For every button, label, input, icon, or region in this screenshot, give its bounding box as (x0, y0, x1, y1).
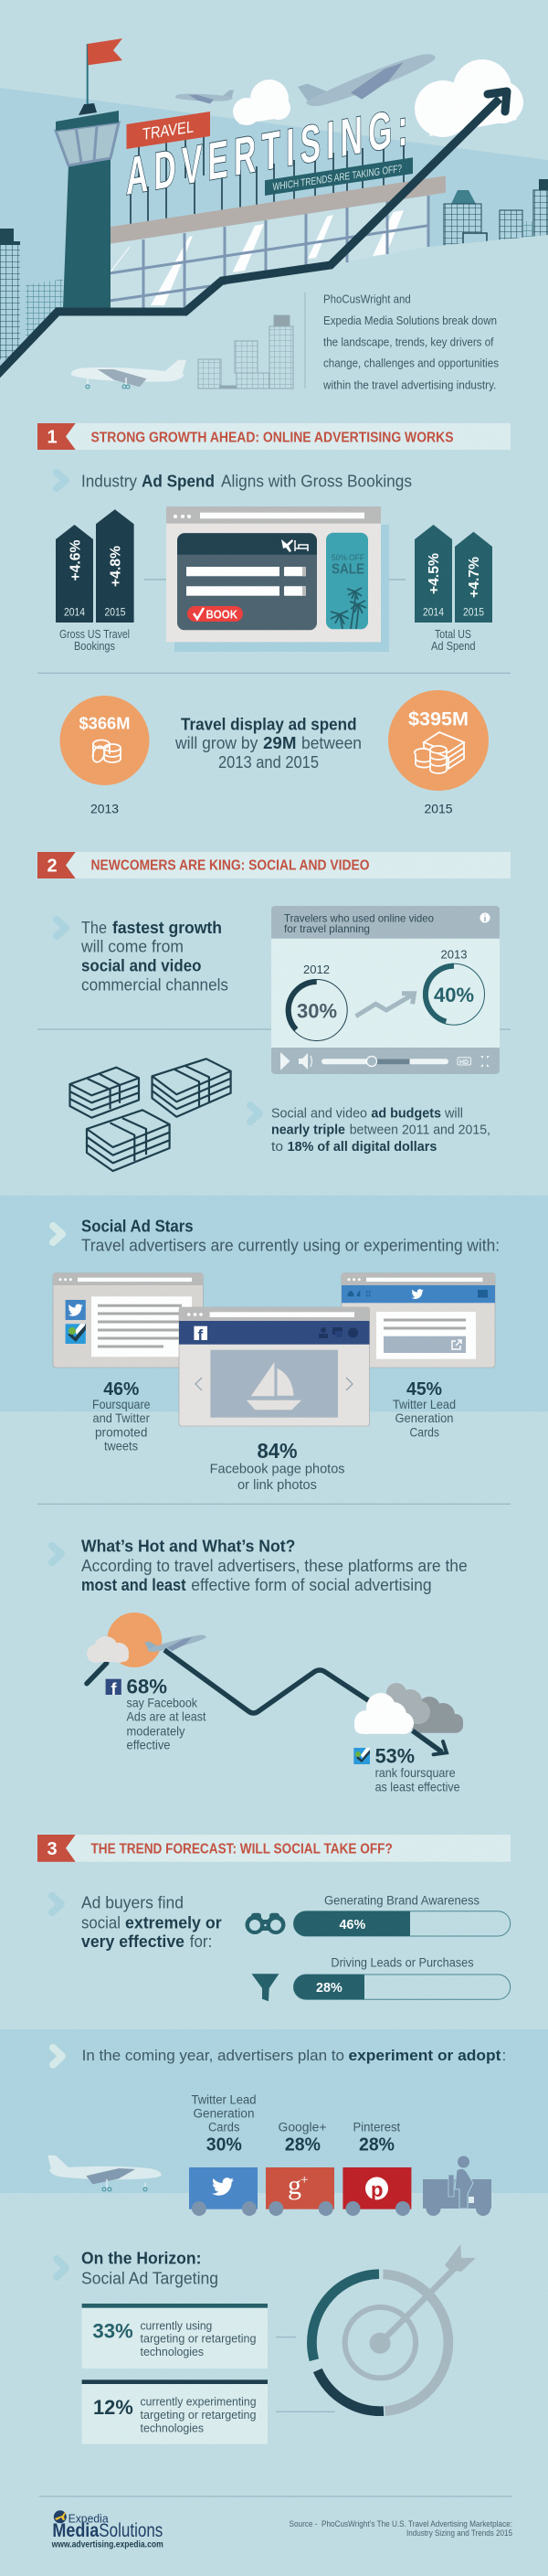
bar: driving leads or purchases: Driving Leads or Purchases (331, 1956, 474, 1970)
section 3 banner: THE TREND FORECAST: WILL SOCIAL TAKE OFF? (91, 1841, 393, 1857)
text: ad budgets: nearly triple (271, 1123, 345, 1138)
heading: ad spend: Industry (81, 471, 138, 490)
source note: Source - PhoCusWright’s The U.S. Travel Advertising Marketplace: (289, 2519, 512, 2529)
heading: social ad stars: Social Ad Stars (81, 1218, 194, 1236)
donut: 2012 30%: 30% (297, 999, 337, 1022)
chart: target (311, 2244, 476, 2411)
stat: 2013 spend (60, 696, 150, 815)
chart: total US ad spend arrows: 2014 (423, 605, 444, 618)
heading: ad spend (81, 471, 412, 490)
logo: expedia media solutions: Media (52, 2520, 100, 2541)
icon: large plane (298, 41, 440, 118)
chart: hot and not path (87, 1613, 463, 1754)
icon: chevron (53, 1226, 62, 1242)
bar: driving leads or purchases (252, 1956, 511, 2001)
text: display ad spend: between (301, 734, 362, 752)
stat: facebook 68%: say Facebook (126, 1696, 198, 1710)
arrow: trend up (356, 994, 415, 1017)
text: display ad spend: will grow by (174, 734, 258, 752)
player controls: HD (459, 1059, 469, 1066)
stat: foursquare 53% (353, 1744, 460, 1794)
logo: expedia media solutions (51, 2510, 163, 2550)
heading: on the horizon: Social Ad Targeting (81, 2269, 218, 2287)
stat: 84%: Facebook page photos (210, 1462, 345, 1477)
icon: funnel (252, 1974, 279, 2001)
icon: chevron (53, 2048, 62, 2065)
icon: chevron (57, 920, 66, 936)
stat card: 33% using: targeting or retargeting (141, 2332, 256, 2346)
text: ad buyers: for: (190, 1932, 212, 1951)
stat: 2013 spend: $366M (79, 715, 130, 733)
text: fastest growth: The (81, 919, 107, 937)
stat: 2015 spend (388, 690, 489, 815)
logo: expedia media solutions: Expedia (68, 2511, 109, 2525)
browser: lead generation cards (342, 1273, 495, 1368)
text: fastest growth: commercial channels (81, 975, 228, 994)
section 3 banner (37, 1835, 511, 1862)
text: ad budgets: will (444, 1106, 463, 1121)
text: ad budgets: ad budgets (371, 1106, 441, 1121)
stat: 84%: 84% (258, 1439, 298, 1463)
video player panel (271, 906, 500, 1074)
cart: twitter 30% (189, 2093, 258, 2216)
stat card: 33% using: 33% (92, 2319, 133, 2342)
icon: cloud large (415, 59, 523, 137)
chart: total US ad spend arrows (415, 525, 492, 653)
stat: 45%: Generation (395, 1410, 453, 1425)
heading: coming year (82, 2047, 506, 2064)
icon: coins and notes (415, 732, 464, 773)
text: fastest growth (80, 919, 228, 994)
browser: booking page (166, 506, 389, 652)
stat: foursquare 53%: 53% (375, 1744, 415, 1767)
stat: 84%: or link photos (237, 1477, 317, 1493)
chart: total US ad spend arrows: Ad Spend (431, 640, 476, 653)
booking form: BOOK (206, 607, 238, 622)
video player panel: Travelers who used online video (284, 911, 434, 924)
text: ad budgets: Social and video (271, 1106, 367, 1121)
icon: sailboat (247, 1362, 301, 1410)
icon: chevron (52, 1546, 61, 1562)
sale ad (326, 533, 368, 629)
stat: 45%: Twitter Lead (393, 1397, 456, 1411)
cart: google plus 28%: + (300, 2173, 308, 2187)
heading: coming year: experiment or adopt (349, 2047, 501, 2064)
icon: facebook (194, 1326, 207, 1344)
text: display ad spend: 29M (263, 734, 296, 752)
text: ad buyers (81, 1894, 222, 1951)
section 2 banner: 2 (47, 856, 58, 876)
cart: pinterest 28%: p (371, 2178, 383, 2201)
heading: what's hot: effective form of social advertising (191, 1576, 432, 1594)
section 2 banner (37, 852, 511, 878)
stat: 2015 spend: 2015 (424, 801, 453, 815)
icon: foursquare (353, 1748, 370, 1764)
sign: travel: TRAVEL (142, 118, 194, 144)
icon: money stacks (69, 1059, 231, 1171)
stat: foursquare 53%: as least effective (375, 1779, 460, 1794)
bar: generating brand awareness: 46% (340, 1917, 365, 1932)
chart: gross US travel bookings arrows: Bookings (74, 640, 115, 653)
terminal building (85, 176, 446, 312)
cart: twitter 30%: Twitter Lead (192, 2093, 256, 2107)
text: ad buyers: social (81, 1913, 121, 1932)
stat card: 33% using: currently using (141, 2318, 212, 2332)
stat: foursquare 53%: rank foursquare (375, 1765, 456, 1780)
stat: 2015 spend: $395M (408, 708, 469, 729)
heading: what's hot: According to travel advertisers, these platforms are the (81, 1557, 468, 1575)
cart: google plus 28%: g (288, 2170, 301, 2200)
donut: 2013 40%: 2013 (440, 947, 468, 961)
stat: 46%: and Twitter (93, 1410, 150, 1425)
section 1 banner (37, 423, 511, 450)
stat: 46%: Foursquare (92, 1397, 151, 1411)
text: fastest growth: social and video (81, 957, 201, 975)
text: ad budgets: between 2011 and 2015, (350, 1123, 490, 1138)
chart: gross US travel bookings arrows: +4.8% (108, 546, 124, 587)
chart: total US ad spend arrows: 2015 (463, 605, 484, 618)
sign posts (131, 134, 404, 224)
logo: expedia media solutions: Solutions (99, 2520, 163, 2541)
donut: 2013 40% (424, 947, 484, 1025)
growth arrow (0, 91, 507, 376)
text: ad buyers: extremely or (125, 1913, 222, 1932)
chart: gross US travel bookings arrows (56, 509, 134, 653)
section 2 banner: NEWCOMERS ARE KING: SOCIAL AND VIDEO (91, 858, 369, 874)
text: ad buyers: very effective (81, 1932, 184, 1951)
title: advertising: ADVERTISING: (126, 98, 408, 207)
icon: chevron (52, 1896, 61, 1912)
chart: total US ad spend arrows: +4.7% (467, 557, 482, 598)
icon: storm clouds (354, 1683, 463, 1734)
control tower (56, 103, 119, 308)
logo: expedia media solutions: www.advertising.expedia.com (51, 2539, 163, 2550)
section 3 banner: 3 (47, 1839, 58, 1859)
stat card: 12% experimenting: targeting or retargeting (141, 2408, 256, 2422)
stat card: 12% experimenting: currently experimenting (141, 2395, 256, 2409)
cart: google plus 28%: Google+ (278, 2121, 327, 2134)
intro text: Expedia Media Solutions break down (323, 314, 497, 327)
heading: coming year: : (502, 2047, 506, 2064)
icon: chevron (57, 2259, 66, 2277)
flag (88, 38, 122, 104)
sign: travel (126, 112, 210, 149)
cart: google plus 28%: 28% (285, 2135, 321, 2156)
icon: foursquare (66, 1324, 86, 1344)
stat card: 12% experimenting (82, 2379, 268, 2444)
heading: social ad stars: Travel advertisers are currently using or experimenting with: (81, 1236, 500, 1254)
heading: what's hot: most and least (81, 1576, 186, 1594)
icon: facebook: f (111, 1680, 117, 1698)
stat: facebook 68% (106, 1675, 206, 1751)
icon: cloud (87, 1636, 129, 1663)
browser: promoted tweets (53, 1273, 203, 1368)
heading: on the horizon: On the Horizon: (81, 2250, 201, 2268)
stat: facebook 68%: effective (126, 1737, 171, 1751)
text: ad buyers: Ad buyers find (81, 1894, 184, 1912)
grey skyline (198, 315, 293, 389)
section 1 banner: STRONG GROWTH AHEAD: ONLINE ADVERTISING WORKS (91, 430, 453, 445)
video player panel: for travel planning (284, 922, 370, 935)
stat: facebook 68%: 68% (126, 1675, 167, 1698)
text: display ad spend: 2013 and 2015 (218, 753, 319, 772)
chart: gross US travel bookings arrows: +4.6% (68, 539, 84, 581)
booking form (177, 533, 317, 630)
intro text: the landscape, trends, key drivers of (323, 335, 494, 348)
icon: runway plane (47, 2156, 162, 2191)
intro text: change, challenges and opportunities (323, 357, 499, 370)
donut: 2012 30% (286, 963, 347, 1040)
heading: what's hot (81, 1538, 468, 1594)
cart: pinterest 28% (342, 2121, 411, 2216)
stat: 46% (92, 1379, 151, 1453)
donut: 2013 40%: 40% (434, 984, 474, 1006)
heading: social ad stars (81, 1218, 500, 1254)
sale ad: SALE (332, 562, 364, 578)
stat card: 33% using: technologies (141, 2345, 205, 2358)
heading: coming year: In the coming year, advertisers plan to (82, 2047, 344, 2064)
stat card: 12% experimenting: 12% (93, 2396, 133, 2419)
icon: twitter (66, 1300, 86, 1320)
skyline right (444, 179, 548, 250)
cart: twitter 30%: Generation (194, 2107, 254, 2121)
stat: 46%: promoted (95, 1425, 147, 1440)
icon: coins (90, 740, 121, 764)
text: fastest growth: fastest growth (112, 919, 222, 937)
stat: facebook 68%: Ads are at least (126, 1709, 206, 1724)
browser: facebook page photos (179, 1307, 369, 1426)
stat: 46%: tweets (104, 1439, 138, 1453)
skyline left (0, 229, 63, 359)
stat card: 12% experimenting: technologies (141, 2421, 205, 2434)
icon: chevron (250, 1105, 259, 1122)
icon: plane (144, 1630, 207, 1656)
heading: what's hot: What’s Hot and What’s Not? (81, 1538, 295, 1556)
bar: generating brand awareness (245, 1893, 511, 1936)
stat: 46%: 46% (103, 1379, 140, 1400)
text: ad budgets: to (271, 1140, 283, 1155)
cart: twitter 30%: 30% (206, 2135, 242, 2156)
donut: 2012 30%: 2012 (303, 963, 330, 976)
section 1 banner: 1 (47, 428, 58, 448)
header illustration (0, 38, 548, 389)
chart: total US ad spend arrows: +4.5% (427, 553, 442, 594)
heading: ad spend: Ad Spend (142, 471, 215, 490)
player controls (280, 1052, 490, 1070)
chart: gross US travel bookings arrows: 2014 (64, 605, 85, 618)
icon: baggage tractor (423, 2156, 491, 2216)
source note (289, 2519, 512, 2539)
subtitle banner: WHICH TRENDS ARE TAKING OFF? (272, 164, 402, 193)
stat: facebook 68%: moderately (126, 1723, 184, 1738)
cart: pinterest 28%: 28% (359, 2135, 395, 2156)
icon: chevron (57, 473, 66, 488)
heading: ad spend: Aligns with Gross Bookings (221, 471, 412, 490)
icon: small plane (175, 90, 234, 103)
intro text: PhoCusWright and (323, 293, 411, 306)
source note: Industry Sizing and Trends 2015 (406, 2528, 512, 2539)
stat: 45%: Cards (409, 1425, 439, 1440)
stat: 45% (393, 1379, 456, 1440)
icon: cloud small (233, 80, 290, 125)
chart: total US ad spend arrows: Total US (435, 628, 471, 641)
bar: driving leads or purchases: 28% (316, 1980, 342, 1996)
icon: grounded plane (71, 360, 186, 389)
stat: 45%: 45% (406, 1379, 442, 1400)
cart: google plus 28% (266, 2121, 334, 2216)
cart: pinterest 28%: Pinterest (353, 2121, 400, 2134)
heading: on the horizon (81, 2250, 218, 2287)
intro text: within the travel advertising industry. (322, 378, 496, 392)
sale ad: 50% OFF (332, 553, 364, 562)
text: ad budgets (271, 1106, 490, 1155)
stat card: 33% using (82, 2304, 268, 2368)
stat: 84% (210, 1439, 345, 1493)
text: fastest growth: will come from (80, 938, 184, 956)
chart: gross US travel bookings arrows: Gross US Travel (59, 628, 130, 641)
chart: gross US travel bookings arrows: 2015 (104, 605, 126, 618)
icon: binoculars (245, 1913, 285, 1934)
cart: twitter 30%: Cards (208, 2121, 240, 2134)
text: display ad spend: Travel display ad spend (181, 715, 356, 733)
bar: generating brand awareness: Generating Brand Awareness (324, 1893, 480, 1907)
stat: 2013 spend: 2013 (90, 801, 119, 815)
text: display ad spend (174, 715, 362, 772)
intro text (305, 293, 499, 392)
text: ad budgets: 18% of all digital dollars (288, 1140, 437, 1155)
icon: facebook: f (197, 1326, 203, 1344)
